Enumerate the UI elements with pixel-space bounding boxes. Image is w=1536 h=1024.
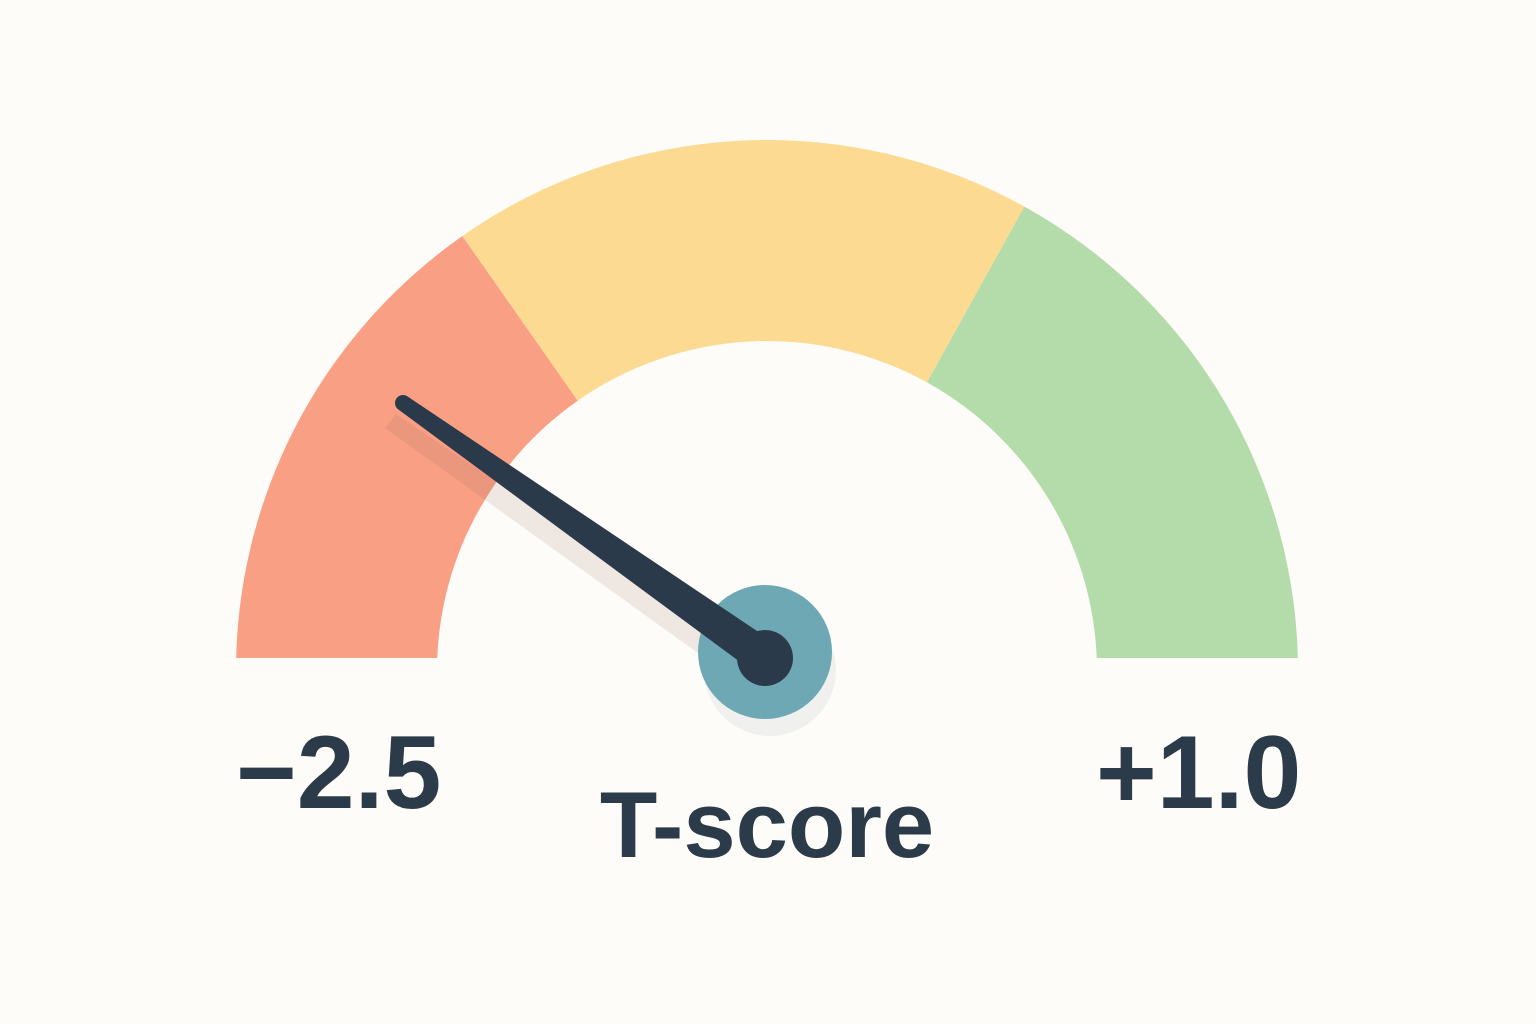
needle shadow (385, 414, 836, 736)
pivot hub (698, 585, 832, 719)
label: T-score: T-score (600, 772, 934, 877)
band: yellow (462, 140, 1024, 401)
band: red (236, 236, 578, 671)
gauge (236, 140, 1298, 736)
needle (395, 395, 793, 686)
label: +1.0: +1.0 (1096, 715, 1301, 831)
label: -2.5: −2.5 (236, 715, 441, 831)
gauge arc bands (236, 140, 1298, 671)
band: green (927, 207, 1298, 671)
